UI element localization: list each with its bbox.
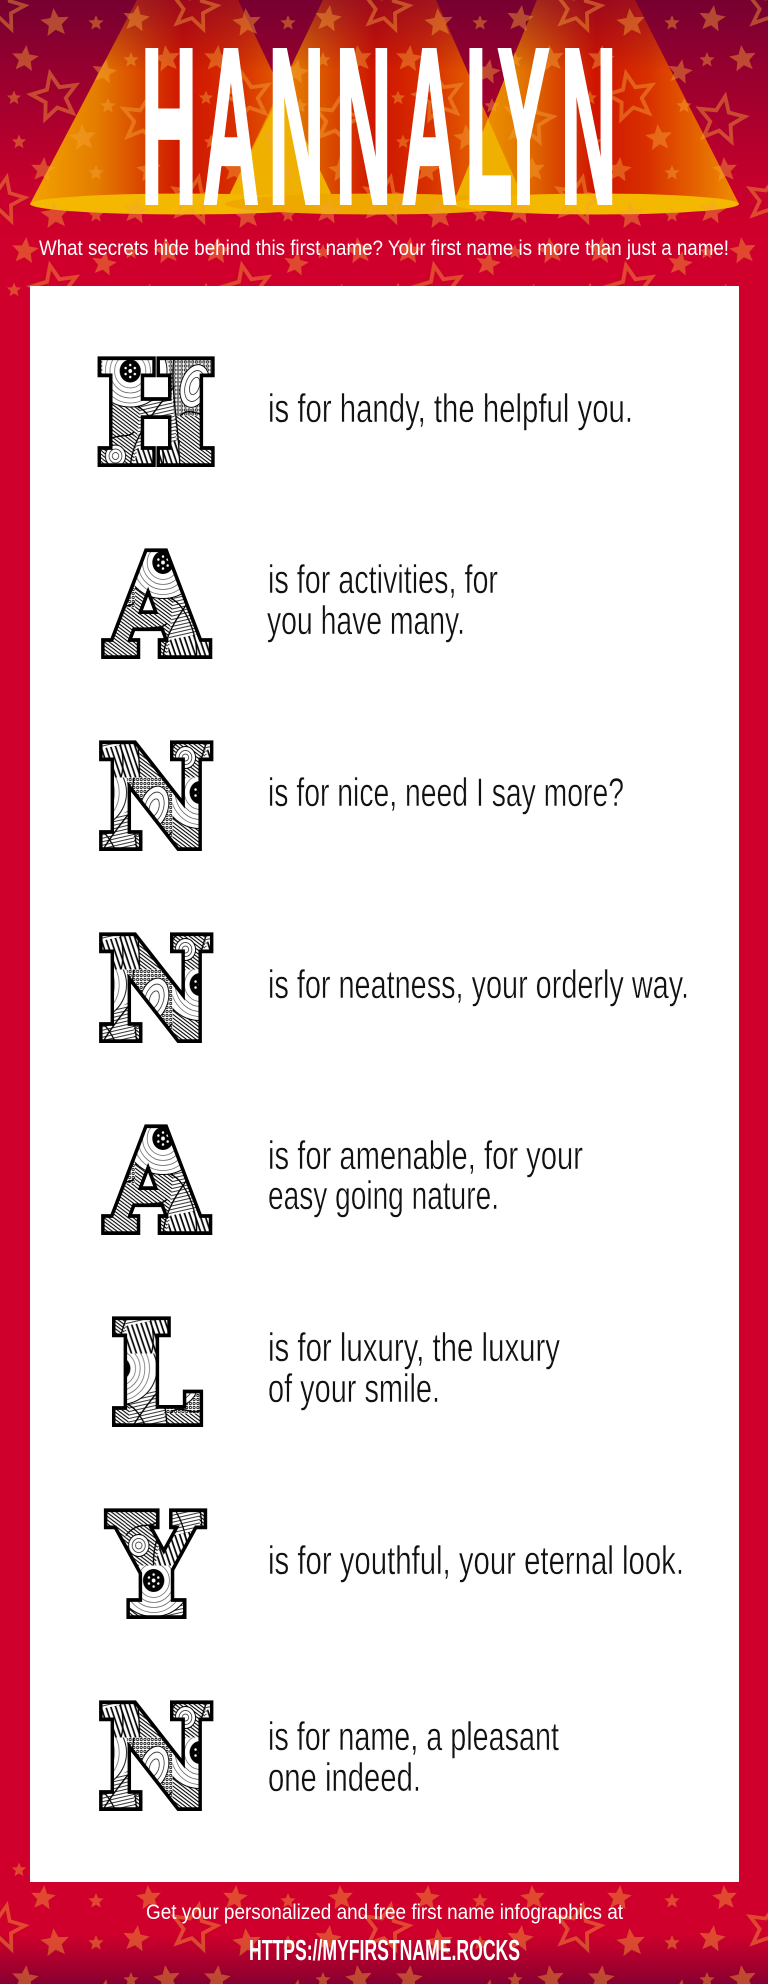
text: N meaning: is for nice, need I say more? [268,771,624,815]
icon: decorated letter Y: Y [109,1487,202,1645]
icon: decorated letter N: N [100,912,212,1069]
text: A meaning: you have many. [267,599,465,643]
side strips [0,300,768,1860]
text: L meaning: is for luxury, the luxury [268,1326,560,1370]
row: Y [109,1487,684,1645]
footer url: HTTPS://MYFIRSTNAME.ROCKS [249,1935,520,1967]
row: H [98,336,633,493]
text: N meaning: is for name, a pleasant [268,1715,559,1759]
icon: decorated letter H: H [98,336,214,493]
row: L [112,1295,560,1453]
icon: decorated letter A: A [106,1103,206,1261]
text: A meaning: is for activities, for [268,558,498,602]
icon: decorated letter H: H [98,336,214,493]
text: H meaning: is for handy, the helpful you. [268,387,633,431]
icon: decorated letter A: A [106,527,206,685]
icon: decorated letter N: N [100,720,212,877]
text: N meaning [268,1715,559,1800]
row: N third [100,1680,559,1837]
text: L meaning [268,1326,560,1411]
text: A meaning [268,1134,583,1218]
row: N second [100,912,689,1069]
text: A meaning: is for amenable, for your [268,1134,583,1178]
text: A meaning [267,558,498,643]
icon: decorated letter N: N [100,720,212,877]
icon: decorated letter L: L [112,1295,200,1453]
text: L meaning: of your smile. [268,1367,440,1411]
text: N meaning: one indeed. [268,1756,421,1800]
text: A meaning: easy going nature. [268,1174,499,1218]
spotlights [30,0,739,214]
row: N [100,720,624,877]
icon: decorated letter L: L [112,1295,200,1453]
row: A [106,527,498,685]
title: HANNALYN [141,4,617,251]
row: A second [106,1103,583,1261]
icon: decorated letter N: N [100,1680,212,1837]
icon: decorated letter Y: Y [109,1487,202,1645]
icon: decorated letter A: A [106,1103,206,1261]
icon: decorated letter N: N [100,1680,212,1837]
icon: decorated letter N: N [100,912,212,1069]
panel: letter meanings [30,286,739,1882]
icon: decorated letter A: A [106,527,206,685]
footer call to action: Get your personalized and free first name infographics at [146,1901,623,1924]
